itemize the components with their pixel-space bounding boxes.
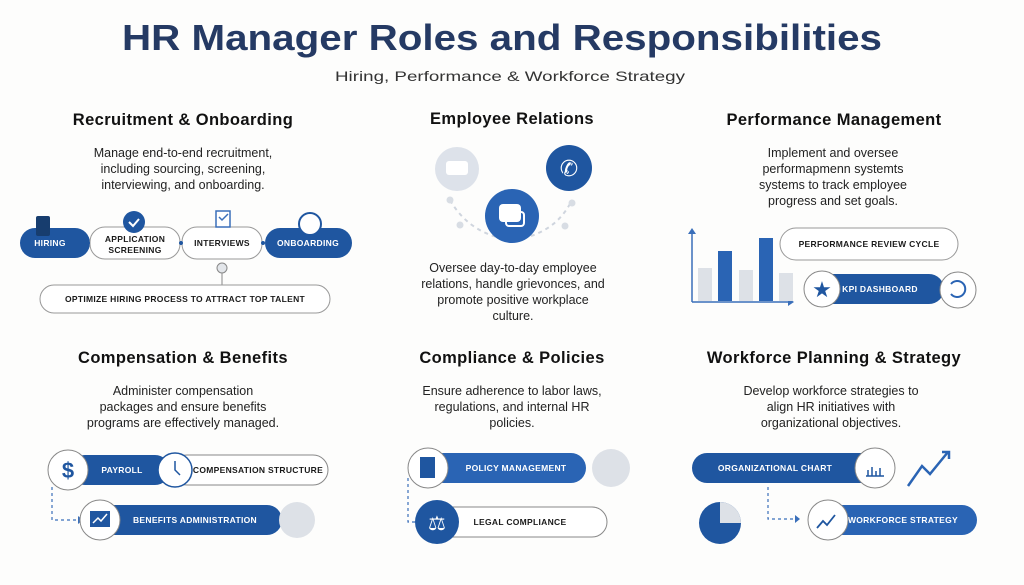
text: workforce — [743, 384, 919, 430]
text: compliance: Ensure adherence to labor laws, — [422, 384, 602, 398]
heading: employee relations: Employee Relations — [430, 110, 594, 128]
text: employee relations: culture. — [492, 309, 534, 323]
flow: hiring steps: HIRING — [34, 238, 66, 248]
text: performance: systems to track employee — [759, 178, 907, 192]
text: employee relations: relations, handle grievonces, and — [421, 277, 605, 291]
heading: recruitment: Recruitment & Onboarding — [73, 111, 293, 129]
text: compensation — [87, 384, 279, 430]
pills: workforce — [692, 448, 977, 544]
icons: relations network: ✆ — [560, 156, 578, 181]
text: workforce: organizational objectives. — [761, 416, 901, 430]
text: recruitment: including sourcing, screening, — [101, 162, 265, 176]
flow: hiring steps: SCREENING — [108, 245, 162, 255]
subtitle: Hiring, Performance & Workforce Strategy — [335, 68, 685, 84]
pills: compliance: ⚖ — [428, 513, 446, 535]
flow: hiring steps: ONBOARDING — [277, 238, 339, 248]
pills: compensation — [48, 450, 328, 540]
panel: compensation — [48, 349, 328, 540]
text: compliance: regulations, and internal HR — [435, 400, 589, 414]
pills: compliance: LEGAL COMPLIANCE — [474, 517, 567, 527]
pill: kpi dashboard: ★ — [812, 277, 832, 302]
text: compensation: packages and ensure benefits — [100, 400, 266, 414]
pills: compensation: BENEFITS ADMINISTRATION — [133, 515, 257, 525]
text: employee relations — [421, 261, 605, 323]
panel: employee relations — [421, 110, 605, 323]
pill: kpi dashboard: KPI DASHBOARD — [842, 284, 918, 294]
text: workforce: Develop workforce strategies to — [743, 384, 919, 398]
heading: workforce: Workforce Planning & Strategy — [707, 349, 962, 367]
flow: hiring steps: APPLICATION — [105, 234, 165, 244]
heading: compliance: Compliance & Policies — [419, 349, 605, 367]
panel: recruitment — [20, 111, 352, 313]
text: employee relations: Oversee day-to-day employee — [429, 261, 597, 275]
panel: compliance — [408, 349, 630, 544]
pill: kpi dashboard — [804, 271, 976, 308]
callout: optimize: OPTIMIZE HIRING PROCESS TO ATTRACT TOP TALENT — [65, 294, 306, 304]
heading: performance: Performance Management — [726, 111, 942, 129]
heading: compensation: Compensation & Benefits — [78, 349, 288, 367]
panel: workforce — [692, 349, 977, 544]
pill: review cycle — [780, 228, 958, 260]
pills: compliance: POLICY MANAGEMENT — [466, 463, 567, 473]
pills: compensation: COMPENSATION STRUCTURE — [193, 465, 323, 475]
pill: review cycle: PERFORMANCE REVIEW CYCLE — [799, 239, 939, 249]
chart: bars — [688, 228, 794, 306]
pills: workforce: ORGANIZATIONAL CHART — [718, 463, 833, 473]
text: compensation: programs are effectively managed. — [87, 416, 279, 430]
text: employee relations: promote positive workplace — [437, 293, 589, 307]
text: workforce: align HR initiatives with — [767, 400, 895, 414]
pills: workforce: WORKFORCE STRATEGY — [848, 515, 958, 525]
flow: hiring steps — [20, 211, 352, 259]
text: performance: progress and set goals. — [768, 194, 898, 208]
text: compensation: Administer compensation — [113, 384, 253, 398]
pills: compliance — [408, 448, 630, 544]
pills: compensation: PAYROLL — [101, 465, 143, 475]
text: recruitment — [94, 146, 272, 192]
panel: performance — [688, 111, 976, 308]
text: performance — [759, 146, 907, 208]
flow: hiring steps: INTERVIEWS — [194, 238, 250, 248]
pills: compensation: $ — [62, 458, 74, 483]
text: performance: Implement and oversee — [768, 146, 898, 160]
text: performance: performapmenn systemts — [762, 162, 904, 176]
text: compliance — [422, 384, 602, 430]
title: HR Manager Roles and Responsibilities — [122, 17, 882, 58]
icons: relations network — [435, 145, 592, 243]
text: compliance: policies. — [489, 416, 535, 430]
callout: optimize — [40, 263, 330, 313]
text: recruitment: interviewing, and onboarding. — [101, 178, 265, 192]
text: recruitment: Manage end-to-end recruitment, — [94, 146, 272, 160]
